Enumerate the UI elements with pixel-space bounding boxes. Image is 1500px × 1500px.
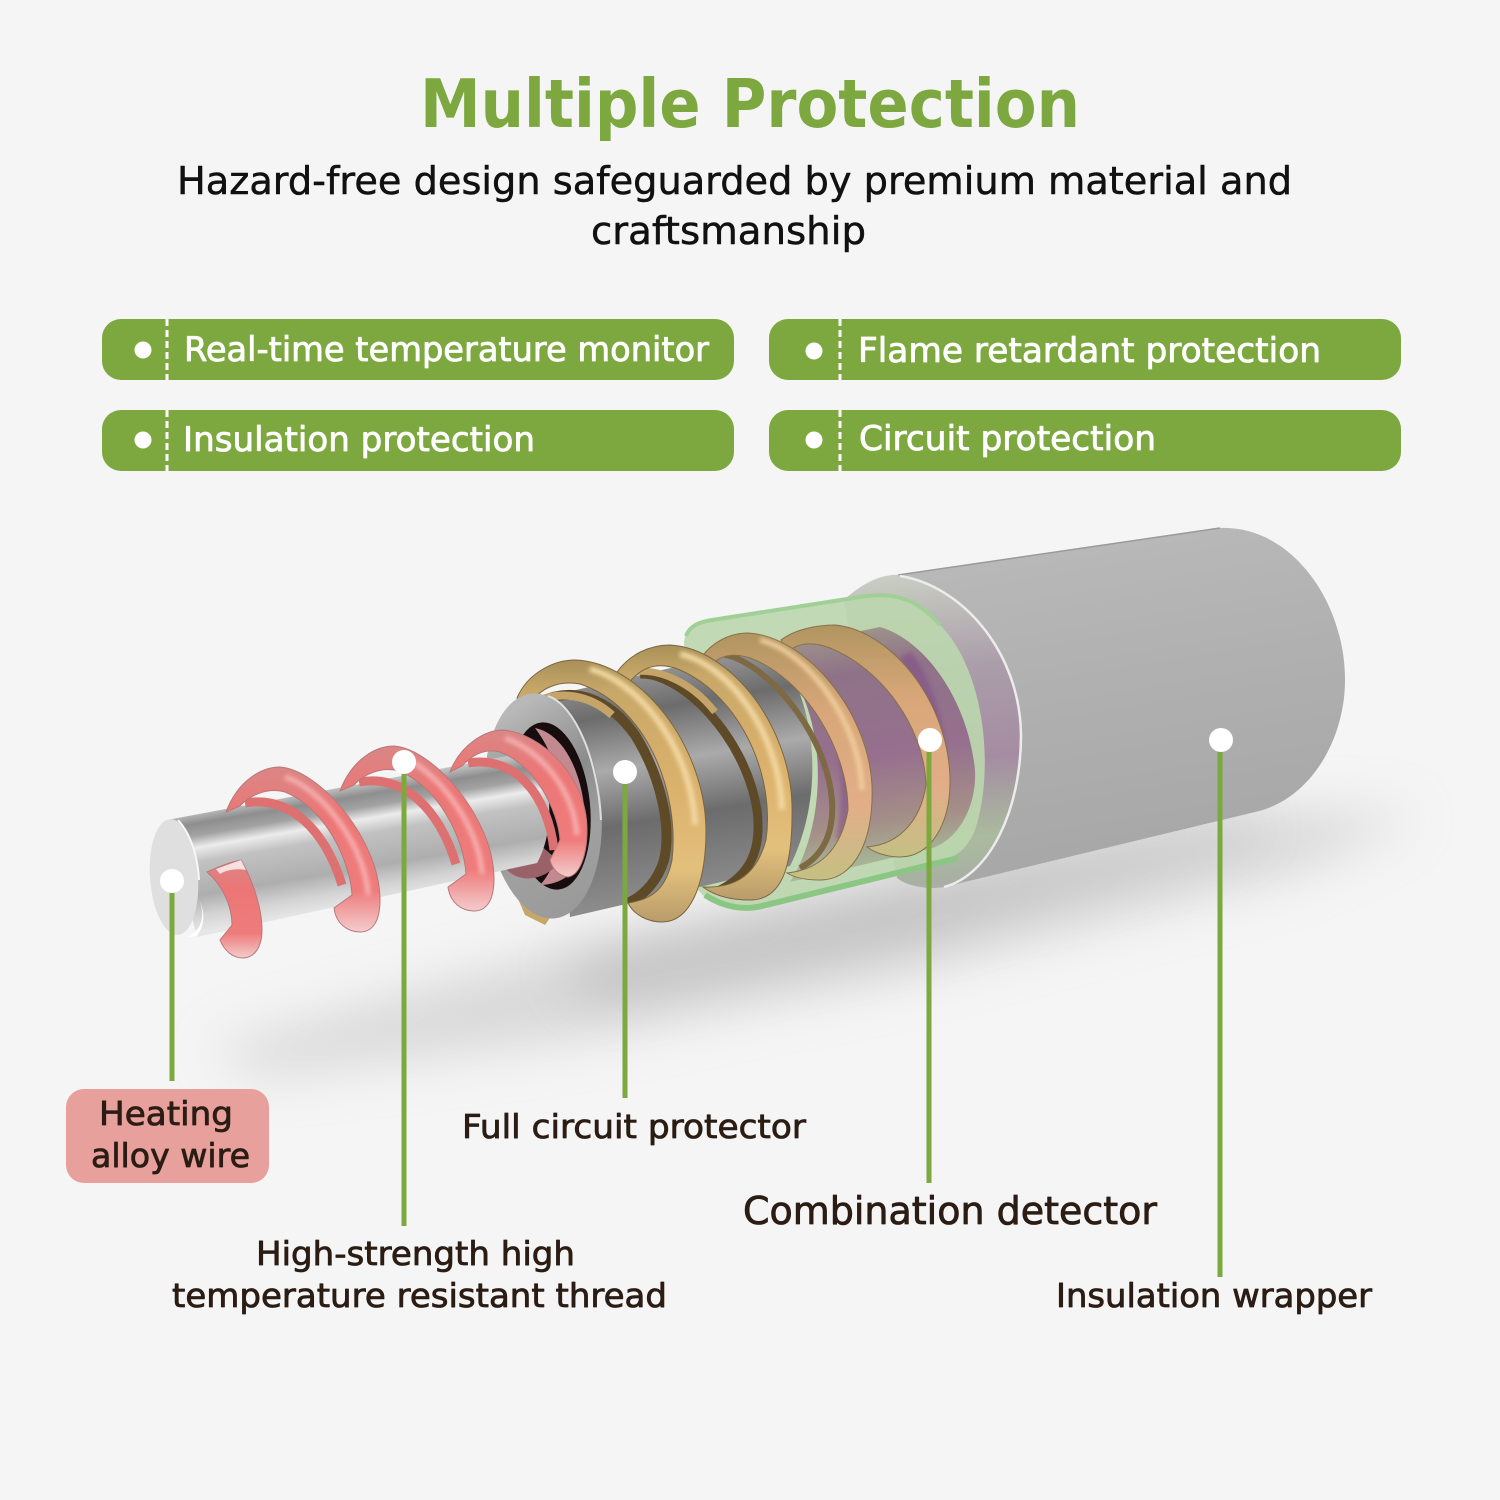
label: heating alloy wire [66, 1089, 269, 1183]
label: combination detector: Combination detector [743, 1189, 1157, 1233]
title: Multiple Protection [420, 65, 1080, 143]
tip coil [207, 860, 262, 958]
label: insulation wrapper: Insulation wrapper [1056, 1276, 1372, 1315]
protector end ring [474, 688, 612, 924]
feature pill: real-time temperature monitor [102, 319, 734, 380]
fourth coil [450, 730, 587, 877]
subtitle: Hazard-free design safeguarded by premium material and [177, 159, 1292, 203]
feature pill: circuit protection [769, 410, 1401, 471]
gold coil: third turn [701, 633, 872, 880]
grey protector sleeve [550, 645, 812, 917]
red heating coils [207, 730, 587, 958]
feature pill: insulation protection: Insulation protection [183, 420, 535, 460]
core end face [146, 817, 203, 937]
gold coil: second turn [617, 645, 792, 900]
second coil [226, 767, 380, 932]
purple detector layer [770, 627, 975, 882]
subtitle: craftsmanship [591, 209, 866, 253]
third coil [340, 746, 494, 911]
cable ground shadow [210, 810, 1420, 1075]
insulation wrapper jacket [898, 528, 1345, 887]
label: heating alloy wire: Heating [99, 1094, 233, 1133]
pointer: insulation wrapper [1209, 728, 1233, 1277]
pointer: high temperature thread [392, 750, 416, 1226]
label: high-strength high temperature resistant thread: temperature resistant thread [172, 1276, 667, 1315]
feature pill: insulation protection [102, 410, 734, 471]
feature pill: flame retardant protection [769, 319, 1401, 380]
green flame retardant tube [684, 595, 985, 909]
label: high-strength high temperature resistant thread: High-strength high [256, 1234, 575, 1273]
label: high-strength high temperature resistant thread [172, 1234, 667, 1315]
pointer: combination detector [918, 728, 942, 1183]
translucent end disc [844, 575, 1021, 888]
pointer: full circuit protector [613, 760, 637, 1098]
gold wire tail [512, 880, 552, 925]
feature pill: real-time temperature monitor: Real-time temperature monitor [184, 330, 709, 370]
label: full circuit protector: Full circuit protector [462, 1107, 806, 1146]
label: heating alloy wire: alloy wire [91, 1136, 250, 1175]
pointer: heating alloy wire [160, 869, 184, 1081]
cable cross-section illustration [146, 528, 1420, 1075]
subtitle [177, 159, 1292, 253]
aluminium core [167, 751, 549, 937]
gold coil: fourth turn [781, 625, 950, 857]
feature pill: flame retardant protection: Flame retardant protection [858, 331, 1321, 371]
gold coil: first turn [517, 660, 706, 922]
feature pill: circuit protection: Circuit protection [859, 419, 1156, 459]
